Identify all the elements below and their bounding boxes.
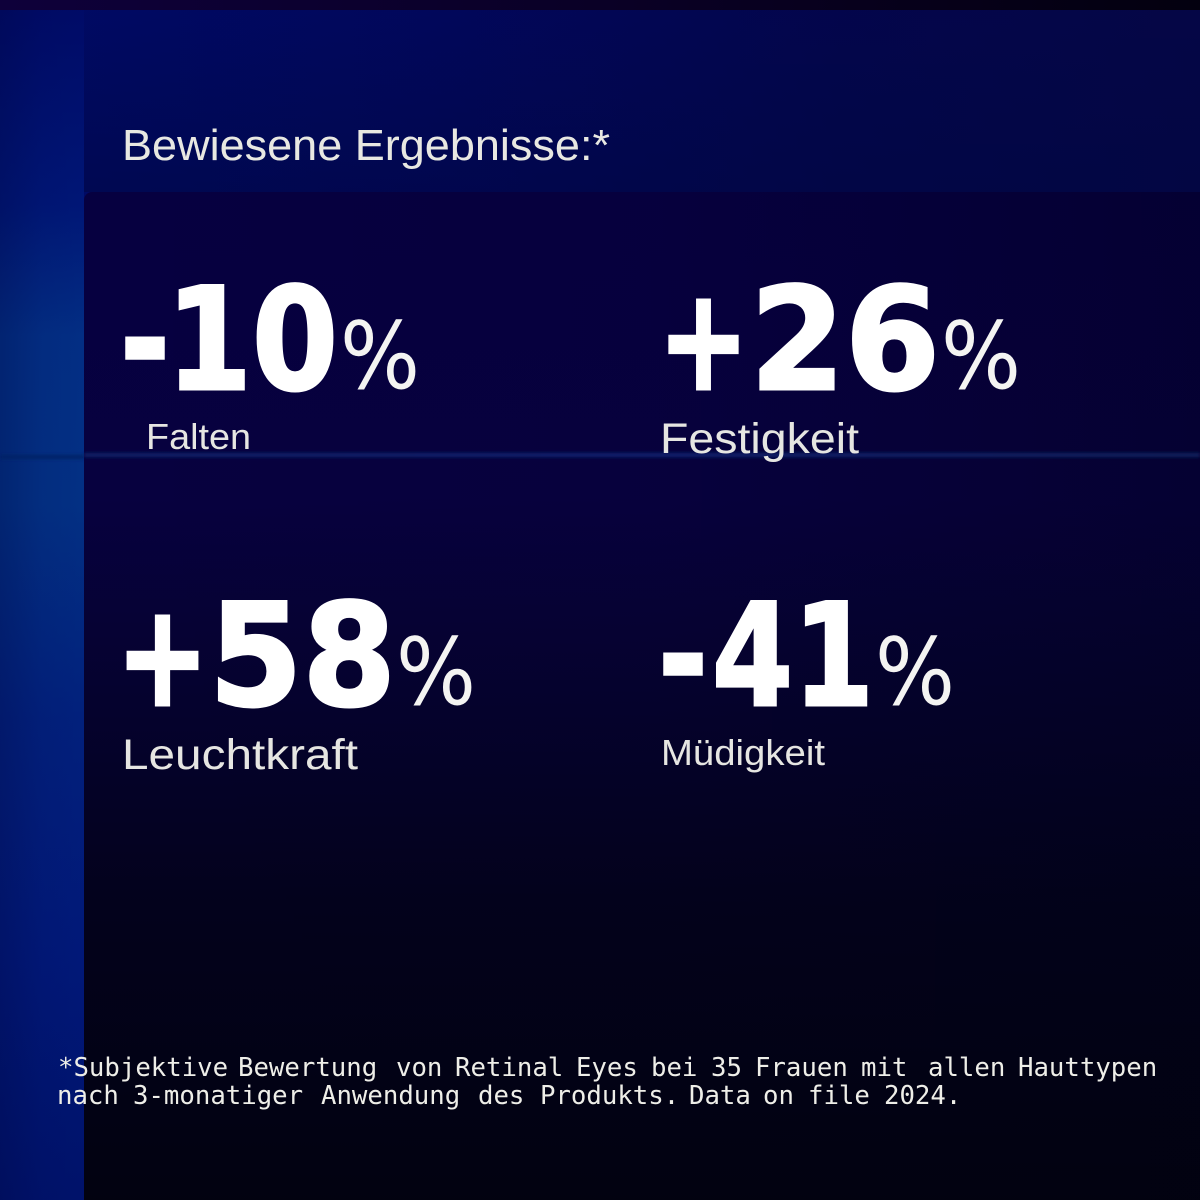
stat: minus 10 percent wrinkles <box>120 258 420 457</box>
stat: minus 10 percent wrinkles: Falten <box>146 416 251 457</box>
stat: plus 26 percent firmness: Festigkeit <box>660 415 859 463</box>
stat: plus 58 percent radiance: + <box>116 574 209 739</box>
footnote: Bewertung <box>238 1053 377 1083</box>
footnote <box>57 1053 1157 1111</box>
footnote: on <box>763 1081 794 1111</box>
stat: minus 10 percent wrinkles: 10 <box>166 258 338 423</box>
footnote: allen <box>928 1053 1005 1083</box>
panel: results <box>84 192 1200 1200</box>
stat: plus 58 percent radiance: % <box>396 618 476 726</box>
stat: minus 41 percent tiredness <box>658 574 955 773</box>
footnote: mit <box>861 1053 907 1083</box>
footnote: Anwendung <box>321 1081 460 1111</box>
footnote: 3-monatiger <box>133 1081 303 1111</box>
footnote: Hauttypen <box>1018 1053 1157 1083</box>
stat: minus 41 percent tiredness: % <box>875 618 955 726</box>
stat: plus 58 percent radiance: Leuchtkraft <box>122 731 358 779</box>
footnote: Retinal <box>455 1053 563 1083</box>
footnote: des <box>478 1081 524 1111</box>
footnote: von <box>396 1053 442 1083</box>
stat: plus 26 percent firmness: + <box>658 258 749 423</box>
footnote: *Subjektive <box>58 1053 228 1083</box>
footnote: Eyes <box>576 1053 638 1083</box>
footnote: Data <box>689 1081 751 1111</box>
stat: minus 10 percent wrinkles: - <box>120 258 170 423</box>
stat: minus 41 percent tiredness: Müdigkeit <box>661 732 825 773</box>
title: Bewiesene Ergebnisse:* <box>122 121 610 170</box>
stat: plus 26 percent firmness: 26 <box>750 258 940 423</box>
stat: minus 41 percent tiredness: 41 <box>712 574 874 739</box>
stat: minus 10 percent wrinkles: % <box>340 302 420 410</box>
footnote: Produkts. <box>540 1081 679 1111</box>
stat: plus 58 percent radiance <box>116 574 476 779</box>
footnote: file <box>808 1081 870 1111</box>
footnote: 35 <box>711 1053 742 1083</box>
stat: plus 26 percent firmness <box>658 258 1021 463</box>
footnote: Frauen <box>755 1053 848 1083</box>
footnote: bei <box>651 1053 697 1083</box>
stat: plus 26 percent firmness: % <box>941 302 1021 410</box>
stat: plus 58 percent radiance: 58 <box>209 574 396 739</box>
footnote: 2024. <box>884 1081 961 1111</box>
footnote: nach <box>57 1081 119 1111</box>
stat: minus 41 percent tiredness: - <box>658 574 708 739</box>
